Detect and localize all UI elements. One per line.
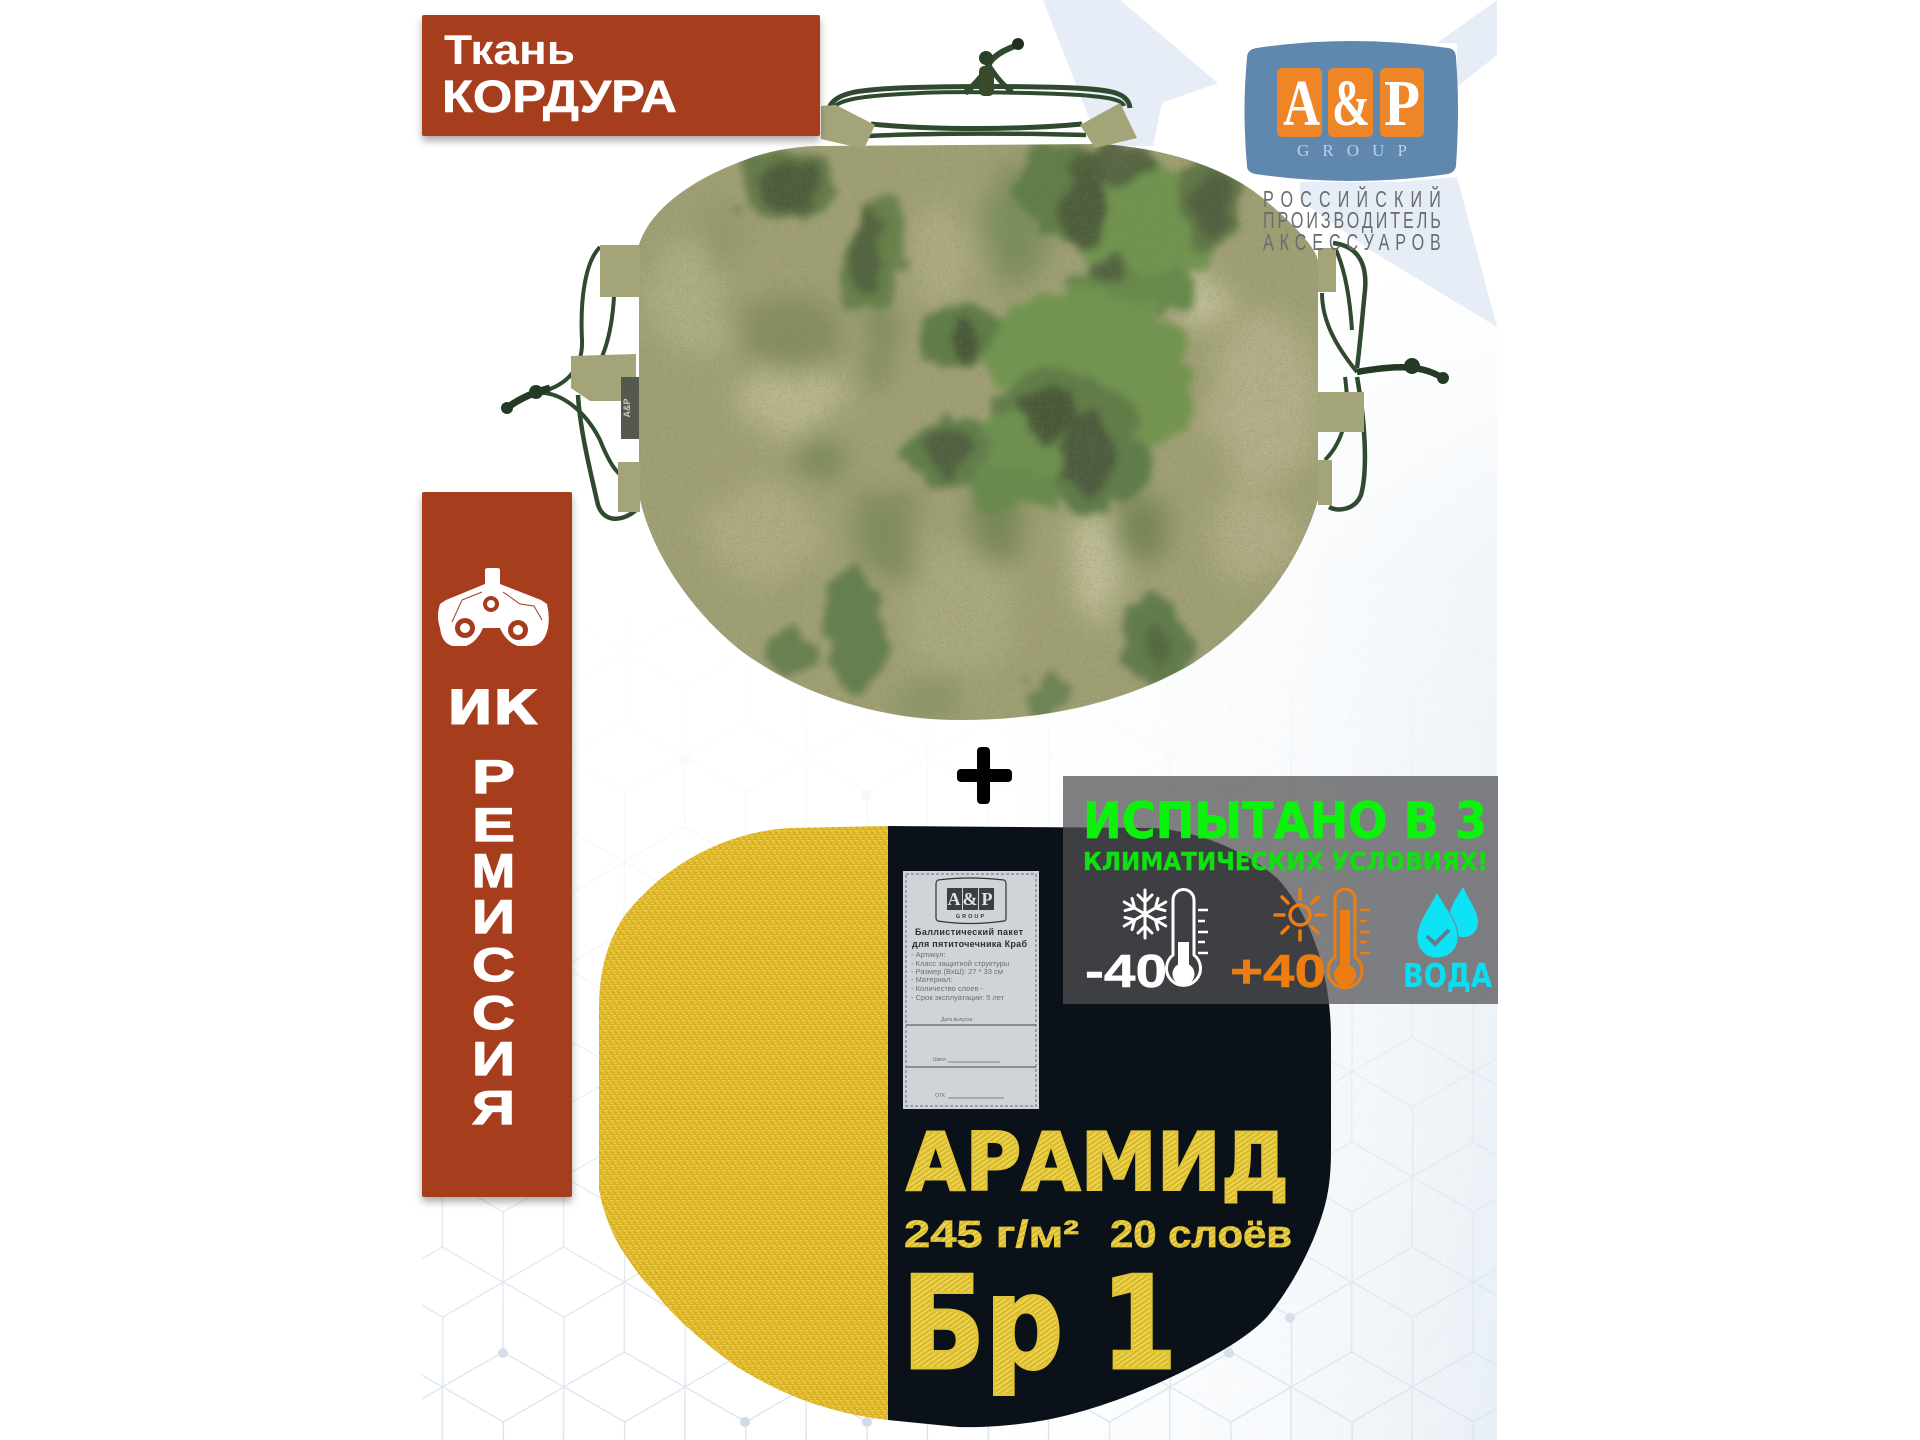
panel: tested in 3 climatic conditions: [1063, 776, 1498, 1004]
cover body fabric: [639, 144, 1318, 720]
text: ИК: ИК: [447, 681, 538, 736]
label: sewn-in product tag: - Количество слоев -: [911, 984, 984, 993]
product: ballistic package black side: [888, 826, 1331, 1427]
label: sewn-in product tag: GROUP: [956, 914, 986, 920]
logo: A&P Group: P: [1384, 67, 1420, 140]
logo: A&P Group: GROUP: [1297, 141, 1407, 160]
text: 245 г/м² and 20 слоёв: 245 г/м²: [904, 1214, 1079, 1256]
tagline: российский производитель аксессуаров: АКСЕССУАРОВ: [1263, 230, 1441, 256]
icon: night vision goggles: [438, 568, 549, 646]
icon: sun: [1275, 890, 1325, 940]
cover top cords: [829, 38, 1130, 136]
product photo: camouflage cordura cover: [501, 38, 1449, 730]
logo: A&P Group: A: [1283, 67, 1320, 140]
icon: cold thermometer: [1166, 890, 1208, 985]
text: РЕМИССИЯ vertical: С: [472, 986, 515, 1039]
label: sewn-in product tag: Баллистический пакет: [915, 927, 1024, 937]
text: -40: -40: [1085, 945, 1167, 997]
text: 245 г/м² and 20 слоёв: 20 слоёв: [1110, 1214, 1292, 1256]
logo: A&P Group: [1244, 41, 1458, 181]
panel: fabric title Ткань КОРДУРА: [422, 15, 820, 136]
label: sewn-in product tag: Дата выпуска: [941, 1017, 973, 1023]
label: sewn-in product tag: &: [962, 889, 978, 909]
text: РЕМИССИЯ vertical: С: [472, 938, 515, 991]
label: sewn-in product tag: для пятиточечника Краб: [912, 939, 1027, 949]
tagline: российский производитель аксессуаров: [1263, 185, 1441, 256]
tagline: российский производитель аксессуаров: РОССИЙСКИЙ: [1263, 185, 1441, 213]
tagline: российский производитель аксессуаров: ПРОИЗВОДИТЕЛЬ: [1263, 208, 1441, 234]
icon: snowflake: [1121, 890, 1169, 938]
heading: ИСПЫТАНО В 3: ИСПЫТАНО В 3: [1083, 792, 1487, 850]
cover right cords: [1322, 243, 1449, 509]
icon: plus sign: [957, 747, 1012, 804]
icon: water drops: [1417, 887, 1478, 958]
text: РЕМИССИЯ vertical: М: [472, 844, 515, 897]
background: pale page panel: [422, 0, 1497, 1440]
label: sewn-in product tag: - Класс защитной структуры: [911, 959, 1009, 968]
label: sewn-in product tag: A: [948, 889, 960, 909]
label: sewn-in product tag: - Артикул:: [911, 950, 946, 959]
camouflage blobs: [630, 140, 1330, 730]
subheading: климатических условиях: КЛИМАТИЧЕСКИХ УСЛОВИЯХ!: [1083, 847, 1488, 876]
cover webbing straps: [571, 103, 1364, 512]
label: sewn-in product tag: [903, 871, 1039, 1109]
cover brand tag: A&P: [622, 398, 632, 418]
label: sewn-in product tag: P: [982, 889, 992, 909]
cover left cords: [501, 247, 636, 519]
icon: hot thermometer: [1328, 889, 1370, 988]
panel: fabric title Ткань КОРДУРА: Ткань: [444, 26, 575, 73]
text: РЕМИССИЯ vertical: [472, 750, 515, 1134]
logo: A&P Group: &: [1332, 67, 1370, 140]
label: sewn-in product tag: - Размер (ВхШ): 27 * 33 см: [911, 967, 1003, 976]
text: Бр 1 protection class: Бр 1: [902, 1250, 1177, 1399]
text: РЕМИССИЯ vertical: Е: [472, 798, 515, 851]
text: РЕМИССИЯ vertical: Р: [472, 750, 515, 803]
text: РЕМИССИЯ vertical: Я: [472, 1081, 515, 1134]
full infographic canvas: [417, 0, 1498, 1440]
product: ballistic package yellow aramid side: [599, 826, 888, 1420]
label: sewn-in product tag: - Материал:: [911, 975, 952, 984]
text: 245 г/м² and 20 слоёв: [904, 1214, 1292, 1256]
text: ВОДА: ВОДА: [1403, 956, 1492, 995]
label: sewn-in product tag: Швея: [933, 1057, 946, 1063]
panel: IR remission: [422, 492, 572, 1197]
panel: fabric title Ткань КОРДУРА: КОРДУРА: [442, 71, 677, 122]
text: РЕМИССИЯ vertical: И: [472, 890, 515, 943]
text: АРАМИД: АРАМИД: [906, 1116, 1289, 1209]
cover brand tag: [621, 377, 639, 439]
text: РЕМИССИЯ vertical: И: [472, 1032, 515, 1085]
text: +40: +40: [1230, 945, 1326, 997]
label: sewn-in product tag: ОТК: [935, 1093, 945, 1099]
label: sewn-in product tag: - Срок эксплуатации: 5 лет: [911, 993, 1005, 1002]
